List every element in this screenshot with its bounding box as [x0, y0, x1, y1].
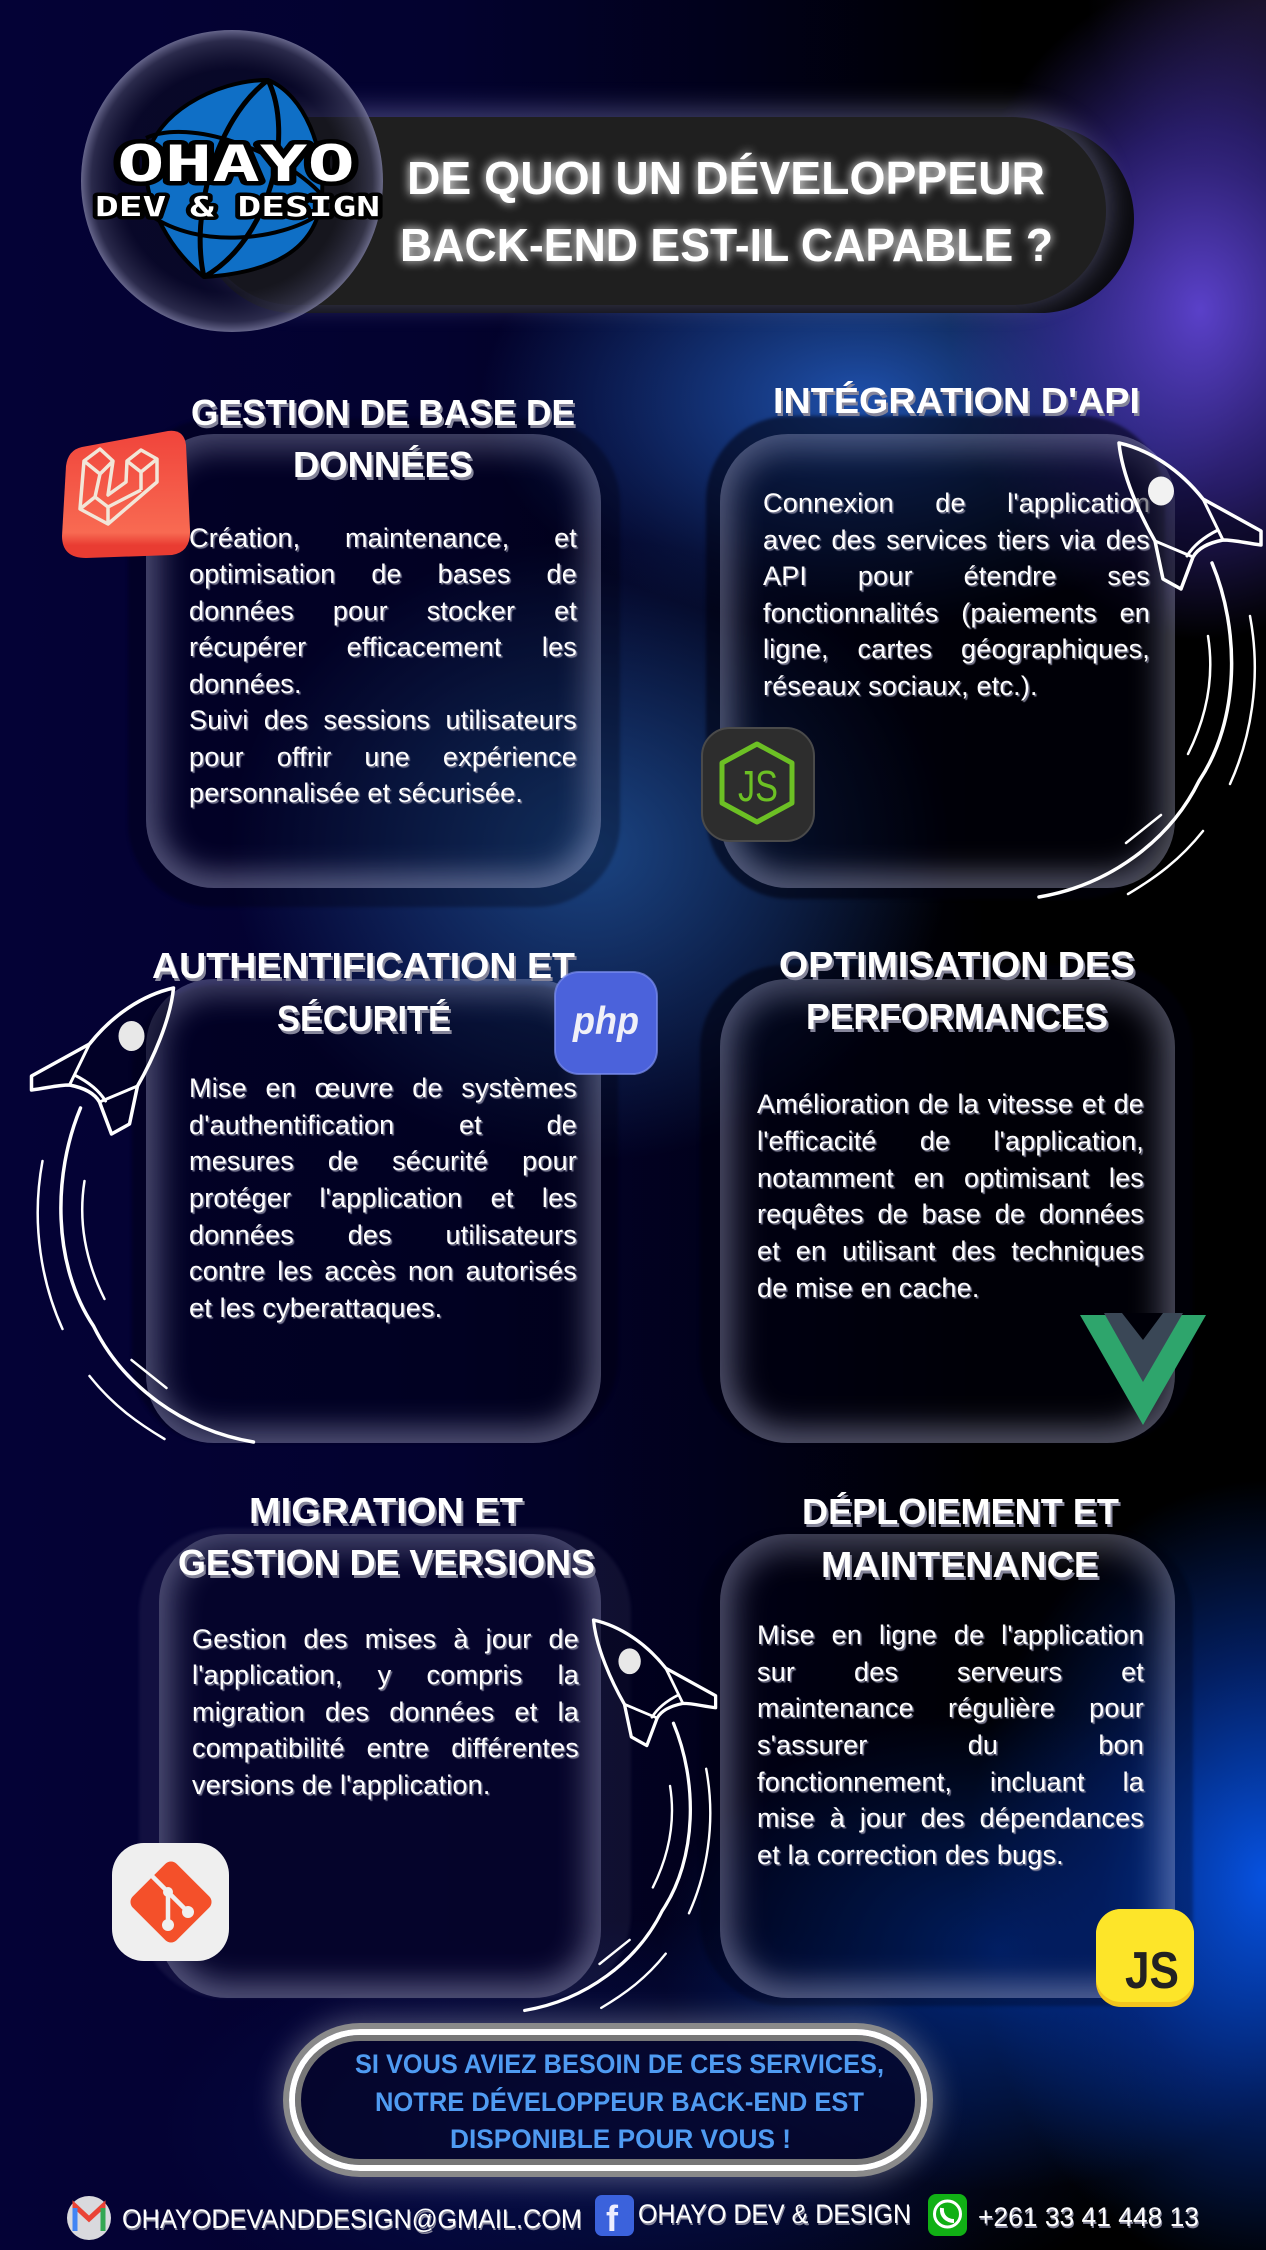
- phone number: +261 33 41 448 13: [978, 2202, 1199, 2232]
- body text: requêtes de base de données: [757, 1199, 1144, 1229]
- heading: DONNÉES: [293, 444, 473, 485]
- body text: migration des données et la: [192, 1696, 579, 1726]
- body text: [757, 1089, 1145, 1303]
- body text: pour offrir une expérience: [189, 742, 577, 772]
- logo wordmark: DEV & DESIGN: [95, 190, 380, 223]
- title text: [394, 146, 1058, 271]
- heading: PERFORMANCES: [806, 996, 1108, 1037]
- icon: WhatsApp: [928, 2194, 967, 2236]
- body text: sur des serveurs et: [757, 1657, 1144, 1687]
- body text: ligne, cartes géographiques,: [763, 634, 1150, 664]
- body text: [763, 488, 1151, 702]
- body text: l'application, y compris la: [192, 1660, 579, 1690]
- icon: Node.js: [701, 727, 815, 842]
- icon: Facebook: [595, 2195, 634, 2239]
- callout text: [355, 2054, 884, 2154]
- icon: PHP: php: [572, 1000, 639, 1043]
- title text: BACK-END EST-IL CAPABLE ?: [400, 219, 1053, 271]
- body text: [192, 1624, 581, 1802]
- panel: intégration d'API: [704, 380, 1175, 900]
- heading: [779, 944, 1136, 1037]
- body text: optimisation de bases de: [189, 559, 577, 589]
- panel: authentification et sécurité: [132, 945, 618, 1443]
- body text: mesures de sécurité pour: [189, 1146, 577, 1176]
- body text: et en utilisant des techniques: [757, 1236, 1144, 1266]
- body text: Mise en ligne de l'application: [757, 1620, 1144, 1650]
- icon: Laravel: [62, 430, 190, 558]
- logo wordmark: [95, 135, 380, 223]
- body text: personnalisée et sécurisée.: [189, 778, 523, 808]
- body text: l'efficacité de l'application,: [757, 1126, 1144, 1156]
- body text: notamment en optimisant les: [757, 1163, 1144, 1193]
- icon: JavaScript: JS: [1125, 1942, 1179, 2000]
- icon: blue globe: [146, 80, 322, 277]
- body text: [757, 1620, 1146, 1872]
- body text: de mise en cache.: [757, 1273, 980, 1303]
- body text: d'authentification et de: [189, 1110, 577, 1140]
- icon: Git: [112, 1843, 229, 1961]
- callout text: DISPONIBLE POUR VOUS !: [450, 2124, 791, 2154]
- body text: données.: [189, 668, 302, 698]
- body text: Gestion des mises à jour de: [192, 1624, 579, 1654]
- body text: maintenance régulière pour: [757, 1693, 1144, 1723]
- body text: [189, 1073, 578, 1324]
- heading: AUTHENTIFICATION ET: [152, 945, 575, 986]
- panel: gestion de base de données: [128, 392, 621, 908]
- panel: déploiement et maintenance: [702, 1491, 1194, 2007]
- icon: Vue.js: [1080, 1313, 1206, 1425]
- rocket: authentification panel: [30, 986, 256, 1444]
- body text: avec des services tiers via des: [763, 524, 1150, 554]
- icon: Gmail: [67, 2196, 111, 2240]
- heading: [178, 1490, 596, 1583]
- heading: OPTIMISATION DES: [779, 944, 1135, 985]
- icon: JavaScript: [1096, 1909, 1194, 2007]
- body text: et les cyberattaques.: [189, 1293, 442, 1323]
- panel: optimisation des performances: [699, 944, 1175, 1443]
- body text: Suivi des sessions utilisateurs: [189, 705, 577, 735]
- logo: Ohayo Dev & Design: [81, 30, 383, 332]
- heading: [802, 1491, 1121, 1585]
- heading: MIGRATION ET: [249, 1490, 523, 1531]
- heading: GESTION DE BASE DE: [191, 392, 575, 433]
- body text: Mise en œuvre de systèmes: [189, 1073, 577, 1103]
- title text: DE QUOI UN DÉVELOPPEUR: [407, 152, 1045, 204]
- body text: fonctionnalités (paiements en: [763, 598, 1150, 628]
- heading: DÉPLOIEMENT ET: [802, 1491, 1119, 1532]
- title banner: [218, 94, 1134, 319]
- body text: récupérer efficacement les: [189, 632, 577, 662]
- footer contacts: [67, 2194, 1199, 2240]
- body text: et la correction des bugs.: [757, 1840, 1064, 1870]
- panel: migration et gestion de versions: [140, 1490, 630, 1998]
- body text: protéger l'application et les: [189, 1183, 577, 1213]
- heading: MAINTENANCE: [821, 1544, 1099, 1585]
- body text: API pour étendre ses: [763, 561, 1150, 591]
- heading: INTÉGRATION D'API: [773, 380, 1140, 421]
- body text: mise à jour des dépendances: [757, 1803, 1144, 1833]
- email address: OHAYODEVANDDESIGN@GMAIL.COM: [122, 2204, 582, 2234]
- body text: fonctionnement, incluant la: [757, 1767, 1144, 1797]
- icon: PHP: [554, 971, 658, 1075]
- heading: SÉCURITÉ: [277, 998, 451, 1039]
- body text: contre les accès non autorisés: [189, 1256, 577, 1286]
- callout text: NOTRE DÉVELOPPEUR BACK-END EST: [375, 2086, 864, 2117]
- callout: call to action: [289, 2029, 927, 2171]
- rocket: migration panel: [523, 1618, 718, 2012]
- icon: Facebook: f: [606, 2198, 619, 2239]
- body text: s'assurer du bon: [757, 1730, 1144, 1760]
- Facebook name: OHAYO DEV & DESIGN: [638, 2199, 911, 2229]
- heading: GESTION DE VERSIONS: [178, 1542, 595, 1583]
- body text: données des utilisateurs: [189, 1220, 577, 1250]
- body text: versions de l'application.: [192, 1770, 491, 1800]
- body text: réseaux sociaux, etc.).: [763, 670, 1038, 700]
- icon: Node.js: JS: [738, 762, 778, 811]
- rocket: API panel: [1037, 441, 1263, 899]
- body text: données pour stocker et: [189, 596, 577, 626]
- body text: compatibilité entre différentes: [192, 1733, 579, 1763]
- body text: Amélioration de la vitesse et de: [757, 1089, 1144, 1119]
- body text: Création, maintenance, et: [189, 522, 577, 552]
- body text: [189, 522, 578, 810]
- body text: Connexion de l'application: [763, 488, 1150, 518]
- heading: [191, 392, 576, 485]
- logo wordmark: OHAYO: [117, 135, 355, 193]
- heading: [152, 945, 577, 1039]
